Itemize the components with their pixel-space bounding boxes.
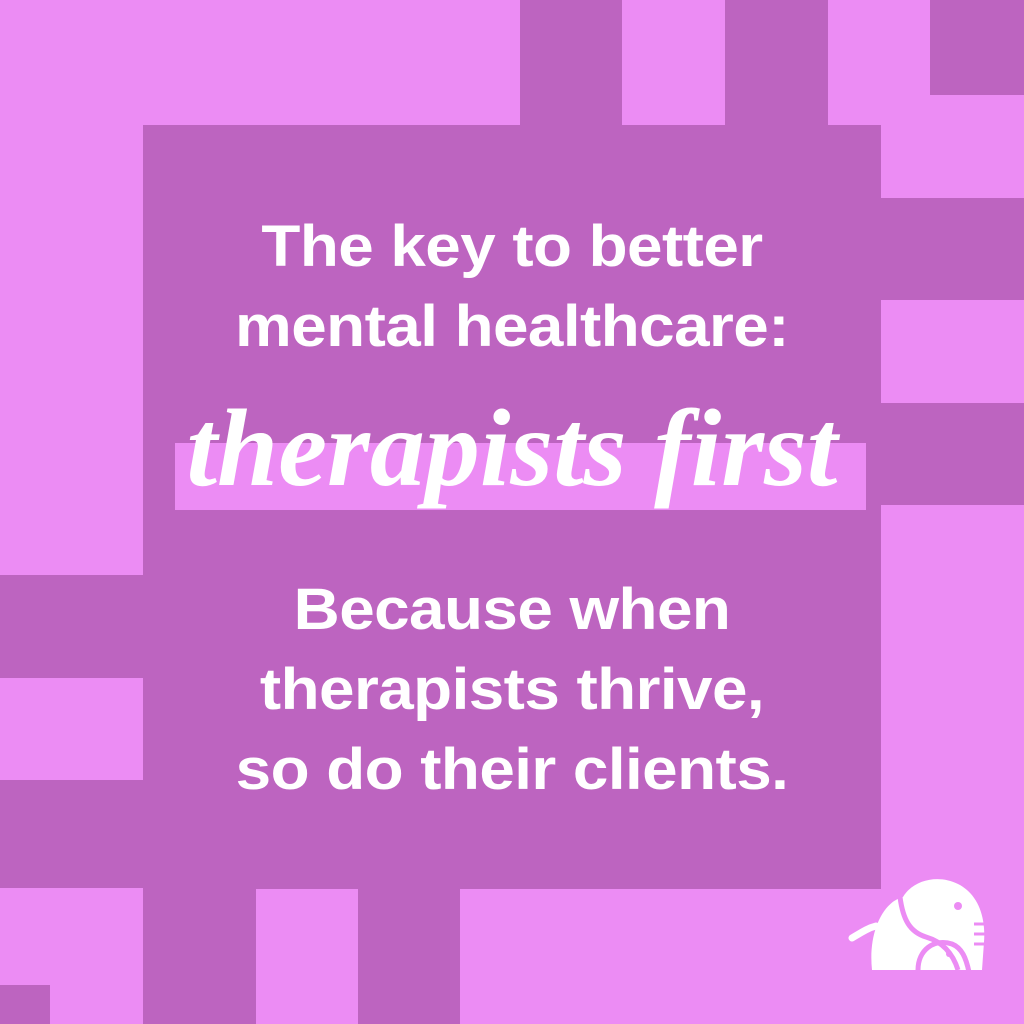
subtext: Because when [294, 577, 730, 642]
subtext: therapists thrive, [260, 657, 764, 722]
subtext: so do their clients. [236, 737, 788, 802]
emphasis: therapists first: therapists first [186, 387, 837, 509]
icon: elephant logo [848, 879, 984, 970]
subtext [236, 577, 788, 802]
highlight box [175, 443, 866, 510]
heading [235, 214, 789, 359]
heading: The key to better [261, 214, 763, 279]
heading: mental healthcare: [235, 294, 789, 359]
